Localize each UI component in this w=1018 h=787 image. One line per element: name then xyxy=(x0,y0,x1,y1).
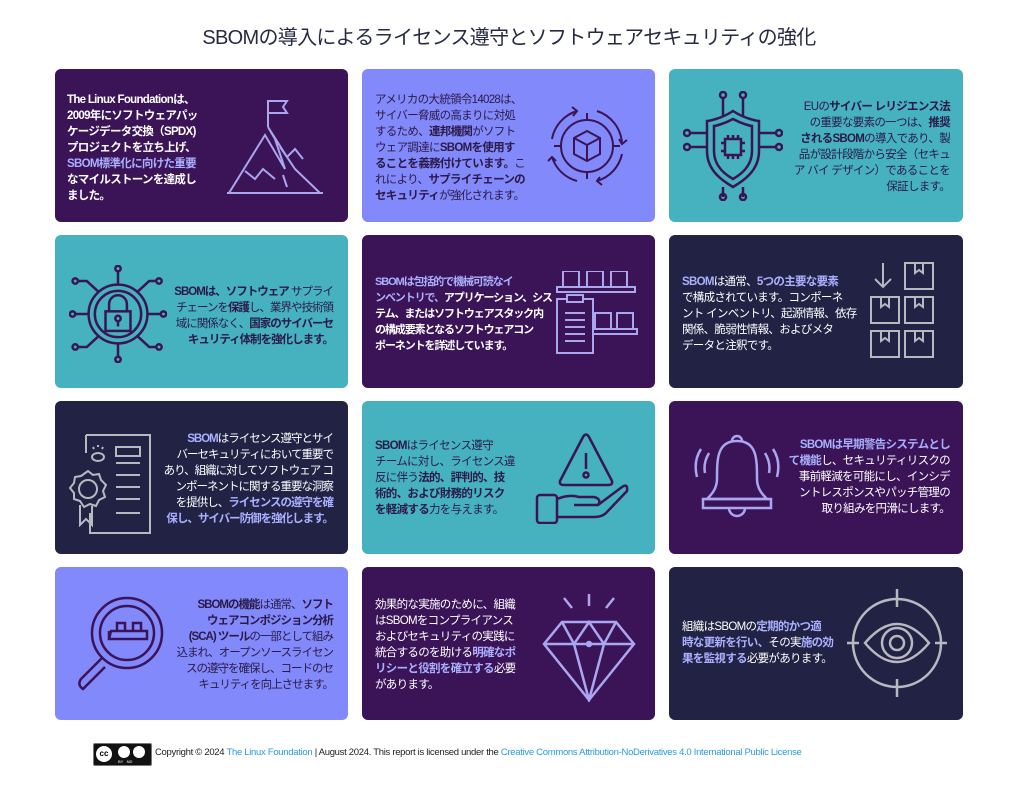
text block: ウェア調達にSBOMを使用す xyxy=(375,142,515,154)
copyright text: Copyright © 2024 The Linux Foundation | August 2024. This report is licensed under the Creative Commons Attribution-NoDerivatives 4.0 International Public License xyxy=(155,747,802,758)
text block: チェーンを保護し、業界や技術領 xyxy=(176,302,333,314)
text block: があります。 xyxy=(375,679,439,691)
text block: 組織はSBOMの定期的かつ適 xyxy=(682,621,821,633)
panel: license compliance insights xyxy=(55,401,348,554)
text block: テム、またはソフトウェアスタック内 xyxy=(375,308,543,320)
text block: ント インベントリ、起源情報、依存 xyxy=(682,308,857,320)
text block: キュリティを向上させます。 xyxy=(198,679,333,691)
panel: early warning xyxy=(669,401,963,554)
text block: ポーネントを詳述しています。 xyxy=(375,340,512,352)
text block: SBOMは通常、5つの主要な要素 xyxy=(682,276,838,288)
title: SBOMの導入によるライセンス遵守とソフトウェアセキュリティの強化 xyxy=(202,27,816,49)
text block: SBOMは包括的で機械可読なイ xyxy=(375,276,512,288)
text block: を提供し、ライセンスの遵守を確 xyxy=(176,497,333,509)
text block: ア バイ デザイン）であることを xyxy=(794,165,950,177)
text block: SBOMはライセンス遵守とサイ xyxy=(187,433,333,445)
text block: The Linux Foundationは、 xyxy=(67,94,195,106)
text block: するため、連邦機関がソフト xyxy=(375,126,515,138)
text block: 統合するのを助ける明確なポ xyxy=(375,647,515,659)
text block xyxy=(794,100,950,193)
text block: およびセキュリティの実践に xyxy=(375,631,515,643)
text block: の構成要素となるソフトウェアコン xyxy=(375,324,533,336)
text block: スの遵守を確保し、コードのセ xyxy=(186,663,333,675)
panel: machine readable inventory xyxy=(362,235,655,388)
text block: SBOMの機能は通常、ソフト xyxy=(198,599,333,611)
icon: magnifier xyxy=(78,596,164,691)
panel: risk mitigation xyxy=(362,401,655,554)
panel: supply chain protection xyxy=(55,235,348,388)
text block: 果を監視する必要があります。 xyxy=(682,653,832,665)
text block: 2009年にソフトウェアパッ xyxy=(67,110,198,122)
text block xyxy=(177,598,334,691)
icon: cc badge: cc xyxy=(100,749,108,758)
text block: 術的、および財務的リスク xyxy=(375,488,505,500)
text block: 品が設計段階から安全（セキュ xyxy=(799,149,950,161)
text block: SBOMは早期警告システムとし xyxy=(800,439,950,451)
icon: shield circuit xyxy=(683,91,783,201)
text block xyxy=(375,93,525,202)
text block: EUのサイバー レリジエンス法 xyxy=(804,101,950,113)
text block: 保証します。 xyxy=(886,181,950,193)
icon: mountain flag xyxy=(227,100,323,194)
icon: cc badge xyxy=(93,743,152,766)
text block: ウェアコンポジション分析 xyxy=(207,615,333,627)
text block xyxy=(375,598,516,691)
panel: SCA tools xyxy=(55,567,348,720)
panel: policies xyxy=(362,567,655,720)
text block xyxy=(174,286,334,346)
text block: サイバー脅威の高まりに対処 xyxy=(375,110,515,122)
icon: certificate xyxy=(68,434,151,534)
text block: アメリカの大統領令14028は、 xyxy=(375,94,522,106)
text block: れにより、サプライチェーンの xyxy=(375,174,525,186)
text block: SBOMは、ソフトウェア サプライ xyxy=(174,286,333,298)
panel: monitoring xyxy=(669,567,963,720)
text block: で構成されています。コンポーネ xyxy=(682,292,843,304)
text block: チームに対し、ライセンス違 xyxy=(375,456,515,468)
text block: を軽減する力を与えます。 xyxy=(375,504,503,516)
text block: ンポーネントに関する重要な洞察 xyxy=(176,481,333,493)
icon: cc badge: BY ND xyxy=(118,759,132,764)
text block: 保し、サイバー防御を強化します。 xyxy=(166,513,333,525)
text block: (SCA) ツールの一部として組み xyxy=(189,631,333,643)
text block xyxy=(164,432,334,525)
text block: はSBOMをコンプライアンス xyxy=(375,615,513,627)
text block xyxy=(682,620,834,665)
text block: て機能し、セキュリティリスクの xyxy=(789,455,950,467)
icon: diamond xyxy=(542,594,636,702)
footer xyxy=(93,743,802,766)
text block: SBOM標準化に向けた重要 xyxy=(67,158,196,170)
text block xyxy=(67,94,198,202)
text block xyxy=(375,276,552,352)
panel: executive order xyxy=(362,69,655,222)
text block: 効果的な実施のために、組織 xyxy=(375,599,515,611)
text block xyxy=(375,439,515,516)
text block: バーセキュリティにおいて重要で xyxy=(177,449,333,461)
icon: hand warning xyxy=(536,433,628,524)
panel: linux foundation xyxy=(55,69,348,222)
text block: ケージデータ交換（SPDX) xyxy=(67,126,196,138)
text block xyxy=(789,438,950,515)
text block: ることを義務付けています。こ xyxy=(375,158,525,170)
text block: ました。 xyxy=(67,190,110,202)
text block: 取り組みを円滑にします。 xyxy=(822,503,950,515)
text block: 域に関係なく、国家のサイバーセ xyxy=(176,318,333,330)
text block: キュリティ体制を強化します。 xyxy=(188,334,333,346)
text block: 時な更新を行い、その実施の効 xyxy=(682,637,833,649)
icon: lock circuit xyxy=(69,265,167,363)
text block: リシーと役割を確立する必要 xyxy=(375,663,515,675)
text block: 関係、脆弱性情報、およびメタ xyxy=(682,324,833,336)
text block: 反に伴う法的、評判的、技 xyxy=(375,472,505,484)
icon: clipboard shelves xyxy=(556,271,638,354)
icon: boxes xyxy=(870,262,934,358)
text block: SBOMはライセンス遵守 xyxy=(375,440,493,452)
icon: bell xyxy=(694,434,780,518)
text block: なマイルストーンを達成し xyxy=(67,174,196,186)
text block: 事前軽減を可能にし、インシデ xyxy=(799,471,950,483)
text block: の重要な要素の一つは、推奨 xyxy=(810,117,950,129)
panel: EU cyber resilience act xyxy=(669,69,963,222)
text block: ンベントリで、アプリケーション、シス xyxy=(375,292,552,304)
text block: 込まれ、オープンソースライセン xyxy=(177,647,333,659)
text block: あり、組織に対してソフトウェア コ xyxy=(164,465,333,477)
text block: ントレスポンスやパッチ管理の xyxy=(799,487,950,499)
text block: セキュリティが強化されます。 xyxy=(375,190,524,202)
text block xyxy=(682,275,857,352)
icon: gear cycle xyxy=(547,106,628,186)
icon: eye target xyxy=(847,589,947,697)
text block: されるSBOMの導入であり、製 xyxy=(800,133,950,145)
text block: プロジェクトを立ち上げ、 xyxy=(67,142,196,154)
panel: five elements xyxy=(669,235,963,388)
text block: データと注釈です。 xyxy=(682,340,778,352)
